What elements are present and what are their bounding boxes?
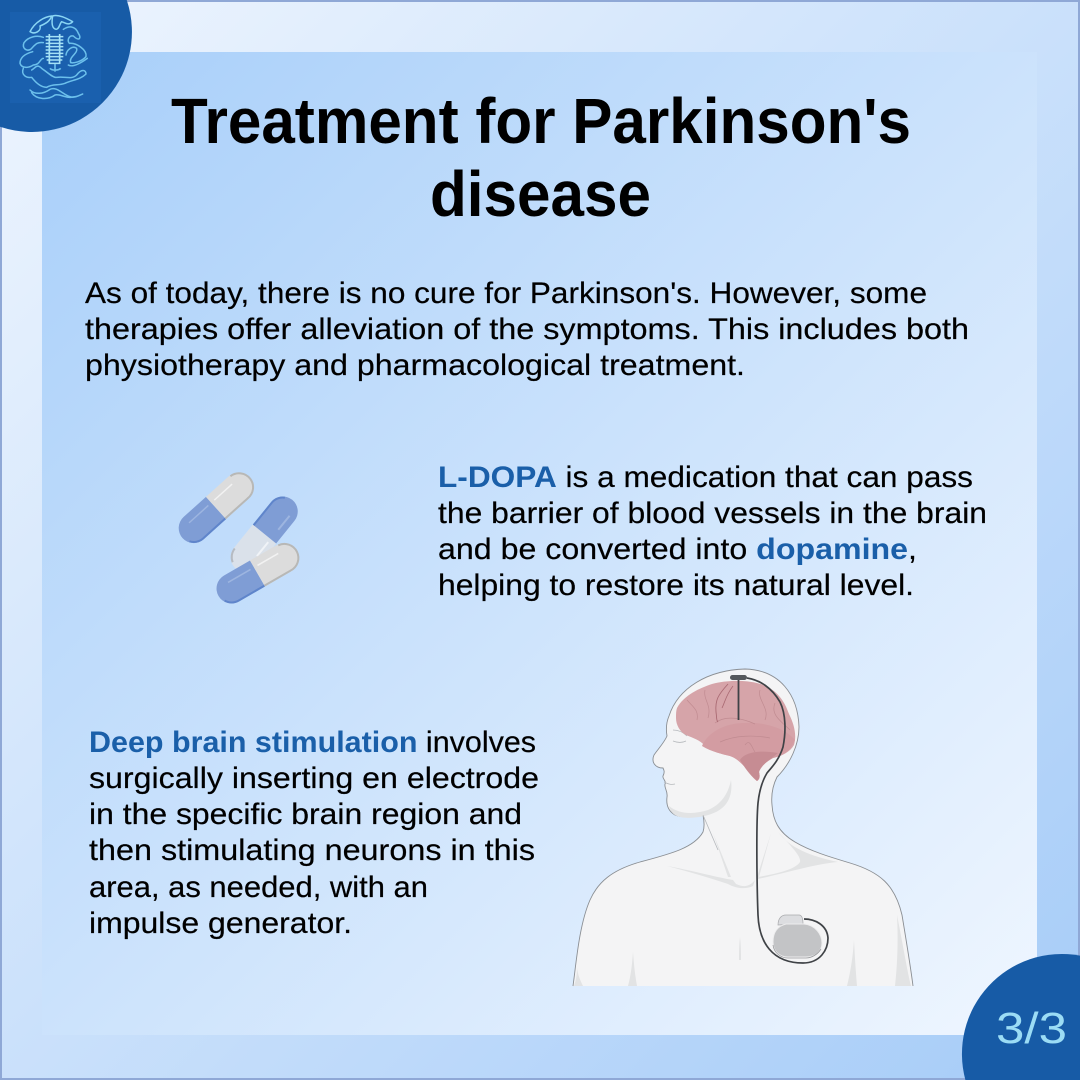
electrode and lead wire [730,675,828,963]
title [171,85,911,230]
L-DOPA text: L-DOPA is a medication that can pass [438,461,973,494]
icon: microphone [46,34,63,72]
intro text: therapies offer alleviation of the symptoms. This includes both [85,313,969,346]
impulse generator [773,915,822,958]
pill 1 [173,467,260,549]
pill 2 (back) [225,490,304,578]
L-DOPA text: helping to restore its natural level. [438,569,914,602]
intro text: physiotherapy and pharmacological treatment. [85,349,745,382]
intro text: As of today, there is no cure for Parkinson's. However, some [85,277,927,310]
illustration: person with deep brain stimulator [573,669,913,986]
pill 3 [211,538,304,609]
page number badge [962,954,1080,1080]
brain [676,681,795,781]
logo badge [0,0,132,132]
deep brain stimulation text [89,726,539,940]
L-DOPA text: and be converted into dopamine , [438,533,917,566]
deep brain stimulation text: then stimulating neurons in this [89,834,535,867]
title: disease [430,158,651,230]
L-DOPA text [438,461,987,602]
title: Treatment for Parkinson's [171,85,911,157]
body silhouette [573,669,913,986]
body shading [574,780,911,986]
deep brain stimulation text: area, as needed, with an [89,871,428,904]
face details [664,730,718,850]
body outline [573,669,913,986]
page number: 3/3 [996,1004,1067,1053]
deep brain stimulation text: impulse generator. [89,907,352,940]
intro text [85,277,969,382]
icon: brain outline [20,15,87,98]
L-DOPA text: the barrier of blood vessels in the brain [438,497,987,530]
deep brain stimulation text: Deep brain stimulation involves [89,726,536,759]
icon: pills [173,467,304,609]
deep brain stimulation text: surgically inserting en electrode [89,762,539,795]
deep brain stimulation text: in the specific brain region and [89,798,522,831]
